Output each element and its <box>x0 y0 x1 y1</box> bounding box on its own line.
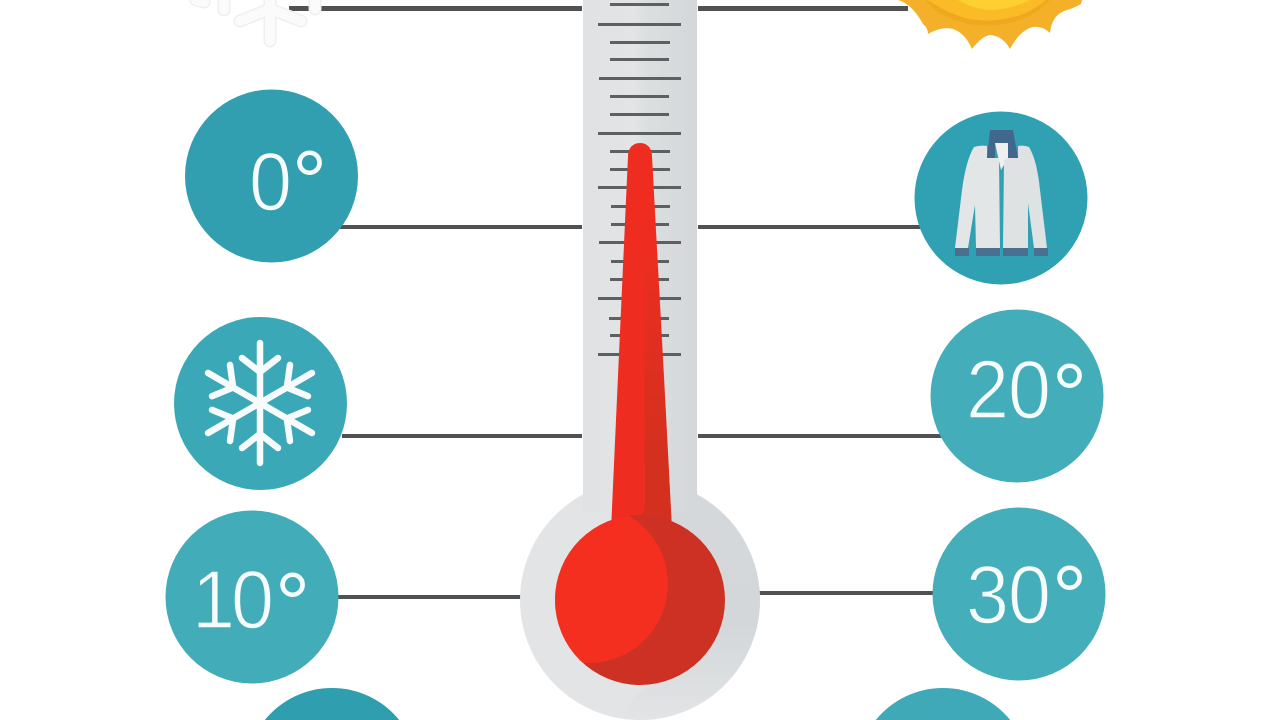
thermometer bulb casing <box>520 480 760 720</box>
badge: 20 degrees <box>930 310 1104 482</box>
badge: 10 degrees <box>166 510 338 684</box>
badge: 0 degrees: ° <box>292 132 327 231</box>
thermometer tube <box>583 0 697 512</box>
badge: 30 degrees: 3 <box>966 548 1009 641</box>
badge: 20 degrees: ° <box>1052 345 1087 444</box>
icon: snowflake, top left (cropped) <box>196 0 315 41</box>
mercury column <box>611 143 672 530</box>
badge: jacket <box>914 112 1088 284</box>
badge: 10 degrees: ° <box>275 554 310 653</box>
badge: 30 degrees: ° <box>1052 547 1087 646</box>
badge: 0 degrees <box>185 90 358 262</box>
icon: jacket <box>955 130 1048 256</box>
badge: snowflake <box>174 317 347 490</box>
thermometer <box>510 0 760 720</box>
bulb casing shaded side <box>623 480 760 720</box>
icon: snowflake <box>199 343 321 463</box>
badge: 20 degrees: 2 <box>966 343 1009 436</box>
scale ticks <box>598 3 681 356</box>
badge: 10 degrees: 1 <box>192 553 235 646</box>
badge: 30 degrees <box>932 508 1106 680</box>
badge: bottom left (cropped) <box>265 688 399 720</box>
badge: bottom right (cropped) <box>876 688 1010 720</box>
badge: 20 degrees: 0 <box>1008 343 1051 436</box>
mercury column shaded side <box>630 230 672 530</box>
mercury bulb <box>555 515 725 685</box>
badge: 10 degrees: 0 <box>231 553 274 646</box>
connector lines <box>289 6 942 599</box>
badge: 0 degrees: 0 <box>249 135 292 228</box>
icon: sun, top right (cropped) <box>898 0 1082 49</box>
badge: 30 degrees: 0 <box>1008 548 1051 641</box>
